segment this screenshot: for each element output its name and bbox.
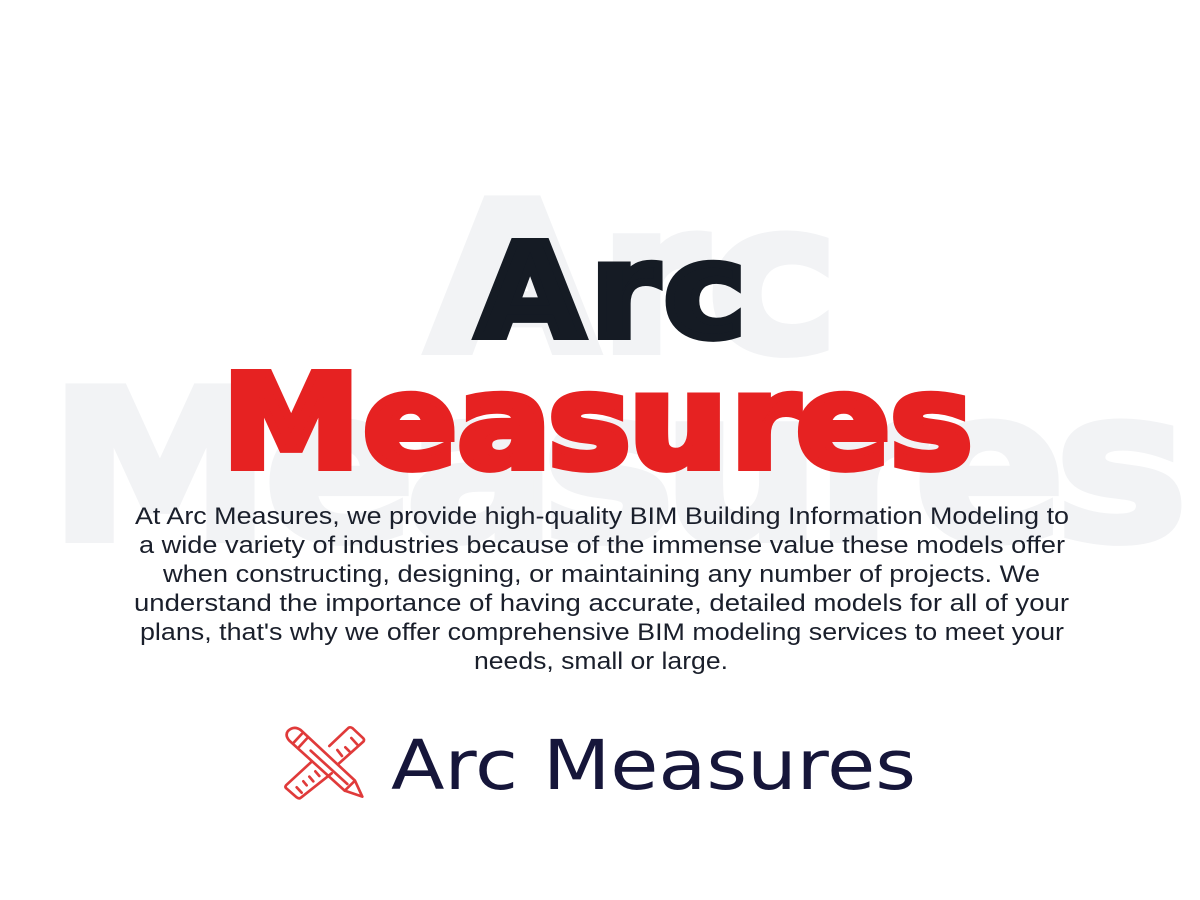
description paragraph: plans, that's why we offer comprehensive BIM modeling services to meet your: [140, 619, 1064, 646]
logo wordmark: Arc Measures: [391, 726, 916, 806]
title: Arc: Arc: [477, 216, 746, 367]
title: Measures: Measures: [223, 347, 972, 498]
icon: crossed pencil and ruler: [285, 727, 364, 798]
background watermark title: Arc: [426, 158, 839, 400]
description paragraph: [134, 503, 1069, 675]
description paragraph: when constructing, designing, or maintaining any number of projects. We: [162, 561, 1040, 588]
description paragraph: a wide variety of industries because of the immense value these models offer: [139, 532, 1065, 559]
description paragraph: understand the importance of having accurate, detailed models for all of your: [134, 590, 1069, 617]
description paragraph: needs, small or large.: [474, 648, 728, 675]
pencil: [287, 728, 362, 797]
background watermark title: [49, 158, 1188, 588]
ruler: [285, 727, 364, 798]
description paragraph: At Arc Measures, we provide high-quality BIM Building Information Modeling to: [135, 503, 1069, 530]
background watermark title: Measures: [49, 346, 1188, 588]
